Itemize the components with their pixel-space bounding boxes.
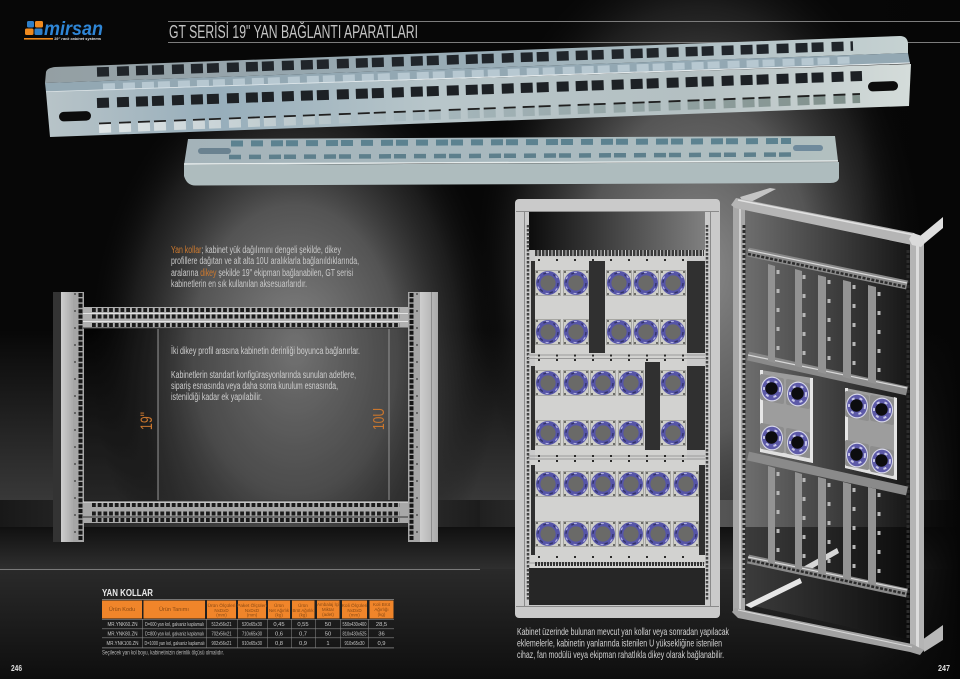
rail top flange	[45, 36, 908, 83]
table header text: Koli Brüt	[373, 602, 391, 607]
table row 3: 902x56x21	[212, 641, 232, 647]
table row 2: 0,7	[299, 632, 307, 638]
rail slots	[198, 148, 231, 154]
fans row 1	[536, 270, 686, 296]
bottom bar	[732, 608, 924, 655]
table row 1: 0,55	[297, 622, 309, 628]
panel 1	[535, 257, 687, 360]
window band	[745, 527, 910, 640]
table row 1: 520x65x30	[242, 622, 262, 628]
table header text: NxDxD	[347, 608, 362, 613]
table row 3: MR.YNK100.ZN	[106, 641, 138, 647]
icon: logo squares	[24, 21, 53, 40]
table header text: Brüt Ağırlık	[292, 608, 314, 613]
logo wordmark: mirsan	[44, 19, 103, 40]
table row 2	[108, 632, 385, 638]
rail holes front upper	[97, 76, 862, 103]
table header text: NxDxD	[214, 608, 229, 613]
table row 1	[108, 622, 387, 628]
table row 3: D=1000 yan kol, galvaniz kaplamalı	[144, 641, 205, 647]
caption text: Kabinet üzerinde bulunan mevcut yan kollar veya sonradan yapılacak	[517, 626, 729, 638]
rack note text: Kabinetlerin standart konfigürasyonlarında sunulan adetlere,	[171, 370, 356, 381]
table top rule	[102, 598, 394, 601]
fan module 2	[845, 388, 897, 480]
rack note text: sipariş esnasında veya daha sonra kurulum esnasında,	[171, 381, 338, 392]
table header text: Paket Ölçüleri	[237, 602, 267, 609]
rack note text: İki dikey profil arasına kabinetin derinliği boyunca bağlanırlar.	[171, 344, 360, 357]
rail channel highlights	[103, 60, 853, 87]
corner joints	[909, 233, 925, 247]
table heading: YAN KOLLAR	[102, 587, 153, 599]
header rules	[168, 21, 960, 43]
table row 2: 0,6	[275, 632, 283, 638]
dimension arrow: 19	[157, 329, 159, 500]
table header text: (mm)	[216, 612, 227, 618]
fans row 3	[536, 370, 686, 396]
table row 2: 810x430x525	[342, 632, 366, 638]
table header text: (mm)	[247, 612, 258, 618]
table header text: Miktar	[322, 607, 335, 612]
top window	[529, 212, 705, 250]
right post	[408, 292, 438, 542]
lower vertical strips	[768, 466, 876, 585]
rail holes upper	[231, 141, 791, 144]
logo tagline: 19" rack cabinet systems	[54, 37, 101, 41]
top bar	[731, 198, 924, 245]
rail holes front lower	[99, 98, 860, 128]
table header text: (kg)	[275, 612, 283, 618]
lower bars	[745, 578, 802, 608]
table row 1: 50	[325, 622, 331, 628]
intro text	[171, 245, 359, 290]
rail channel	[45, 53, 910, 92]
table header text: Ürün Ölçüleri	[208, 602, 236, 609]
table row 2: 50	[325, 632, 331, 638]
left post	[733, 205, 745, 611]
table row 3	[106, 641, 386, 647]
table row 1: 28,5	[376, 622, 387, 628]
rail front	[184, 162, 839, 186]
table row 2: MR.YNK80.ZN	[108, 632, 138, 638]
table header text: (kg)	[378, 612, 386, 617]
short side rail	[184, 136, 839, 186]
side perforations	[528, 225, 707, 600]
table row 2: 702x56x21	[212, 632, 232, 638]
caption text: cihaz, fan modülü veya ekipman rahatlıkla dikey olarak bağlanabilir.	[517, 649, 724, 661]
intro text: profillere dağıtan ve alt alta 10U aralıklarla bağlanıldıklarında,	[171, 256, 359, 267]
top rails	[83, 307, 408, 329]
table row 2: 36	[378, 632, 385, 638]
page number right: 247	[938, 664, 950, 673]
rail holes upper flange	[97, 46, 853, 72]
page number left: 246	[11, 664, 22, 673]
dark slots	[531, 261, 705, 555]
bottom rails	[83, 502, 408, 523]
top right extension	[920, 217, 943, 243]
table header text: (kg)	[299, 612, 307, 618]
table header text: (adet)	[322, 612, 334, 617]
table header text: Ağırlığı	[374, 607, 389, 612]
bottom perforation	[535, 562, 704, 566]
dimension arrow: 10U	[388, 329, 390, 500]
fans row 4	[536, 420, 686, 446]
top left extension	[740, 188, 776, 205]
rack note text	[171, 344, 360, 403]
table row 3: 0,8	[275, 641, 283, 647]
horizontal rails	[748, 250, 907, 594]
table rules	[102, 619, 394, 648]
title: GT SERİSİ 19" YAN BAĞLANTI APARATLARI	[169, 21, 418, 42]
back window	[745, 210, 910, 640]
table header text: Net Ağırlık	[269, 608, 290, 613]
table row 2: D=800 yan kol, galvaniz kaplamalı	[145, 632, 204, 638]
logo: mirsan	[24, 19, 103, 41]
cabinet frame	[515, 199, 720, 618]
mounting dots	[538, 260, 700, 557]
dimension label: 19: 19"	[137, 412, 156, 430]
right post	[908, 240, 924, 650]
rail fold	[184, 161, 838, 164]
table row 1: 512x56x21	[212, 622, 232, 628]
table footnote: Seçilecek yan kol boyu, kabinetinizin derinlik ölçüsü olmalıdır.	[102, 650, 224, 656]
table header text: NxDxD	[245, 608, 260, 613]
table row 1: MR.YNK60.ZN	[108, 622, 138, 628]
table header text: Koli Ölçüleri	[342, 602, 367, 609]
table row 3: 0,9	[377, 641, 386, 647]
rack note text: istenildiği kadar ek yapılabilir.	[171, 392, 262, 403]
bottom extension	[922, 625, 943, 652]
table header text: Ürün Kodu	[109, 606, 135, 613]
table: yan kollar	[102, 587, 394, 656]
rack interior	[84, 328, 408, 502]
left post	[53, 292, 84, 542]
table row 3: 910x65x30	[344, 641, 364, 647]
rack front view	[53, 292, 438, 542]
intro text: Yan kollar; kabinet yük dağılımını dengeli şekilde, dikey	[171, 245, 341, 256]
table row 3: 910x65x30	[242, 641, 262, 647]
table row 1: 0,45	[273, 622, 285, 628]
fan module 1	[760, 370, 813, 463]
table header cells	[102, 600, 394, 618]
bracket ticks	[778, 270, 879, 580]
fans row 5	[536, 472, 698, 496]
table header text: Ürün Tanımı	[159, 606, 189, 613]
rail holes lower	[229, 154, 794, 157]
table header text: Ambalaj İçi	[317, 601, 339, 607]
table header text	[109, 601, 391, 618]
panel 3	[530, 460, 705, 568]
table row 1: 550x430x400	[342, 622, 366, 628]
panel 2	[535, 360, 687, 460]
table row 1: D=600 yan kol, galvaniz kaplamalı	[145, 622, 204, 628]
caption text: eklemelerle, kabinetin yanlarında istenilen U yüksekliğine istenilen	[517, 638, 722, 650]
intro text: aralarına dikey şekilde 19" ekipman bağlanabilen, GT serisi	[171, 268, 353, 279]
upper vertical strips	[768, 264, 876, 384]
perspective cabinet	[731, 188, 943, 655]
table row 2: 710x65x30	[242, 632, 262, 638]
caption text	[517, 626, 729, 661]
rail top face	[184, 136, 838, 165]
table row 3: 1	[326, 641, 330, 647]
rail slots	[59, 111, 91, 122]
bottom window	[529, 568, 705, 605]
fans row 2	[536, 320, 686, 344]
long side rail	[45, 36, 911, 137]
rail front face	[46, 64, 911, 137]
intro text: kabinetlerin en sık kullanılan aksesuarlarıdır.	[171, 279, 307, 290]
divider rails	[528, 355, 705, 563]
table row 3: 0,9	[299, 641, 307, 647]
front cabinet with fans	[515, 199, 720, 618]
fans row 6	[536, 522, 698, 546]
table header text: Ürün	[298, 602, 308, 608]
upper rail	[535, 250, 704, 256]
table header text: Ürün	[274, 602, 284, 608]
dimension label: 10U: 10U	[371, 408, 388, 430]
table header text: (mm)	[349, 612, 360, 618]
